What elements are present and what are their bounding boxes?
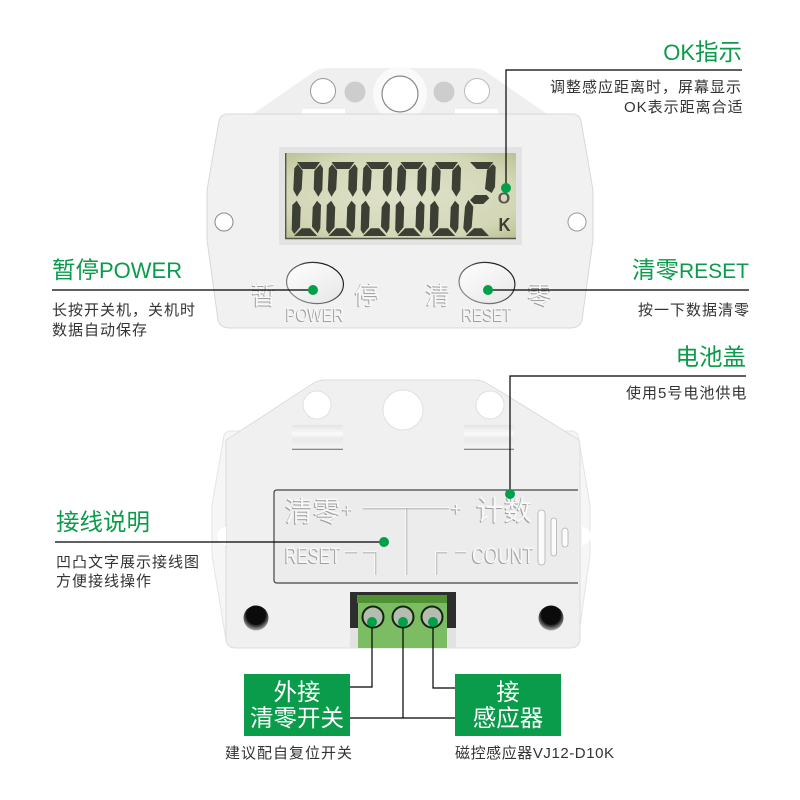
callout: OK indicator: OK表示距离合适 bbox=[624, 99, 744, 116]
embossed wiring text: + bbox=[342, 500, 353, 521]
side notches bbox=[217, 527, 591, 545]
callout: OK indicator: 调整感应距离时，屏幕显示 bbox=[550, 78, 742, 96]
LCD screen bbox=[285, 153, 516, 239]
embossed wiring text: + bbox=[451, 499, 462, 520]
callout: wiring guide: 接线说明 bbox=[56, 509, 150, 535]
screw holes bbox=[244, 606, 564, 630]
panel: back of counter bbox=[212, 380, 591, 648]
embossed button labels: 清 bbox=[425, 282, 451, 310]
embossed wiring text: 计数 bbox=[476, 495, 532, 526]
embossed signal mark bbox=[538, 510, 568, 565]
back body bbox=[226, 380, 580, 648]
label box: sensor bbox=[455, 674, 561, 736]
callout: battery cover: 使用5号电池供电 bbox=[626, 385, 747, 402]
embossed button labels: 停 bbox=[354, 282, 380, 310]
LCD bezel bbox=[279, 147, 522, 245]
label box: external reset switch: 清零开关 bbox=[250, 705, 344, 731]
battery clips bbox=[292, 425, 514, 450]
LCD shaded edge bbox=[286, 153, 516, 238]
LCD OK letters: O bbox=[498, 190, 510, 208]
embossed button labels: RESET bbox=[462, 305, 512, 325]
embossed wiring text: 清零 bbox=[285, 496, 341, 527]
callout: POWER: 数据自动保存 bbox=[52, 322, 148, 339]
RESET button bbox=[457, 260, 517, 306]
callout: battery cover bbox=[505, 344, 747, 499]
callout: battery cover: 电池盖 bbox=[676, 344, 746, 370]
embossed wiring lines bbox=[345, 508, 466, 575]
embossed button labels bbox=[251, 282, 553, 325]
top holes bbox=[303, 390, 504, 430]
embossed button labels: 暂 bbox=[251, 282, 277, 310]
callout: OK indicator: OK指示 bbox=[663, 39, 742, 65]
callout: RESET bbox=[483, 257, 750, 319]
callout: wiring guide: 凹凸文字展示接线图 bbox=[56, 554, 200, 571]
callout: wiring guide: 方便接线操作 bbox=[56, 573, 152, 590]
embossed wiring text: COUNT bbox=[472, 543, 534, 568]
embossed button labels: POWER bbox=[286, 305, 344, 325]
device body bbox=[207, 114, 593, 328]
side bulges bbox=[212, 431, 590, 640]
embossed wiring text bbox=[285, 495, 534, 568]
embossed button labels: 零 bbox=[527, 282, 553, 310]
embossed wiring text: RESET bbox=[285, 543, 341, 568]
callout: RESET: 按一下数据清零 bbox=[638, 302, 750, 319]
LCD OK letters: K bbox=[498, 215, 510, 235]
mounting holes bbox=[215, 213, 586, 231]
callout: POWER: 长按开关机，关机时 bbox=[52, 302, 196, 319]
label box: external reset switch bbox=[244, 674, 350, 736]
connector lines from terminals bbox=[350, 617, 455, 718]
terminal block bbox=[350, 592, 456, 648]
LCD digits 000002 bbox=[292, 162, 496, 236]
panel: front of counter bbox=[207, 67, 593, 328]
callout: wiring guide bbox=[55, 509, 389, 590]
label box: sensor: 接 bbox=[496, 679, 520, 705]
callout: RESET: 清零RESET bbox=[632, 257, 749, 283]
callout: POWER bbox=[52, 257, 318, 339]
top mounting tab bbox=[253, 67, 547, 121]
POWER button bbox=[285, 260, 345, 306]
callout: OK indicator bbox=[501, 39, 744, 193]
callout: POWER: 暂停POWER bbox=[52, 257, 182, 283]
caption: reset switch: 建议配自复位开关 bbox=[225, 744, 353, 762]
caption: sensor model: 磁控感应器VJ12-D10K bbox=[455, 744, 615, 762]
label box: sensor: 感应器 bbox=[473, 705, 543, 731]
label box: external reset switch: 外接 bbox=[274, 679, 320, 705]
LCD OK letters bbox=[498, 190, 510, 235]
battery cover label panel bbox=[274, 490, 578, 583]
